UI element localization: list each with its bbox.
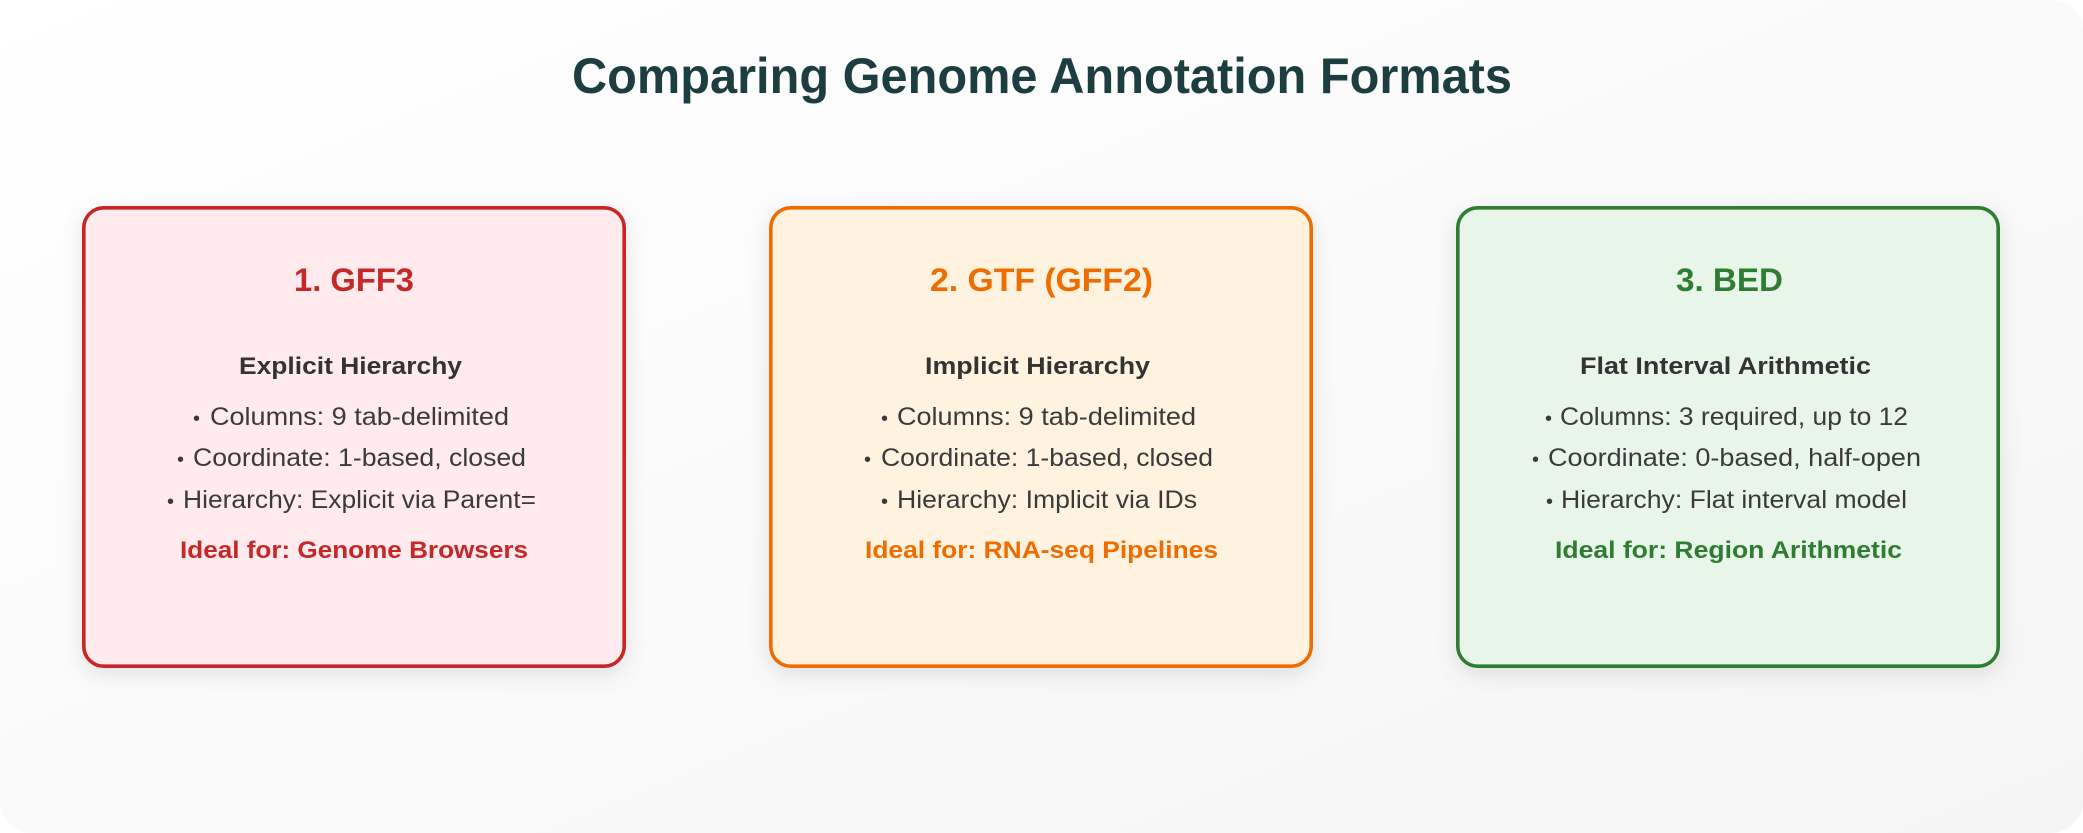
bullet: hierarchy: •: [1546, 491, 1553, 513]
bullet: hierarchy: Hierarchy: Implicit via IDs: [897, 486, 1197, 514]
panel background: GTF: [771, 208, 1311, 666]
bullet: coordinate: •: [864, 449, 871, 471]
bullet: columns: •: [1545, 408, 1552, 430]
bullet: columns: •: [881, 408, 888, 430]
panel: BED: [1458, 208, 1998, 666]
subheading: flat interval arithmetic: Flat Interval Arithmetic: [1580, 353, 1871, 380]
ideal use: RNA-seq pipelines: Ideal for: RNA-seq Pipelines: [865, 537, 1218, 564]
bullet: columns: Columns: 9 tab-delimited: [897, 403, 1196, 431]
bullet: coordinate: •: [177, 449, 184, 471]
bullet: coordinate: Coordinate: 1-based, closed: [881, 444, 1213, 472]
bullet: columns: •: [193, 408, 200, 430]
panel: GTF: [771, 208, 1311, 666]
ideal use: region arithmetic: Ideal for: Region Arithmetic: [1555, 537, 1902, 564]
bullet: columns: Columns: 3 required, up to 12: [1560, 403, 1908, 431]
bullet: hierarchy: Hierarchy: Explicit via Parent=: [183, 486, 536, 514]
bullet: columns: Columns: 9 tab-delimited: [210, 403, 509, 431]
subheading: explicit hierarchy: Explicit Hierarchy: [239, 353, 463, 380]
bullet: coordinate: •: [1532, 449, 1539, 471]
panel heading: GFF3: 1. GFF3: [294, 262, 414, 298]
panel heading: BED: 3. BED: [1676, 262, 1783, 298]
bullet: hierarchy: Hierarchy: Flat interval model: [1561, 486, 1907, 514]
bullet: coordinate: Coordinate: 1-based, closed: [193, 444, 526, 472]
bullet: coordinate: Coordinate: 0-based, half-open: [1548, 444, 1921, 472]
panel heading: GTF: 2. GTF (GFF2): [930, 262, 1153, 298]
title: Comparing Genome Annotation Formats: [572, 48, 1512, 104]
panel: GFF3: [84, 208, 624, 666]
bullet: hierarchy: •: [881, 491, 888, 513]
bullet: hierarchy: •: [167, 491, 174, 513]
subheading: implicit hierarchy: Implicit Hierarchy: [925, 353, 1151, 380]
panel background: BED: [1458, 208, 1998, 666]
panel background: GFF3: [84, 208, 624, 666]
ideal use: genome browsers: Ideal for: Genome Browsers: [180, 537, 528, 564]
